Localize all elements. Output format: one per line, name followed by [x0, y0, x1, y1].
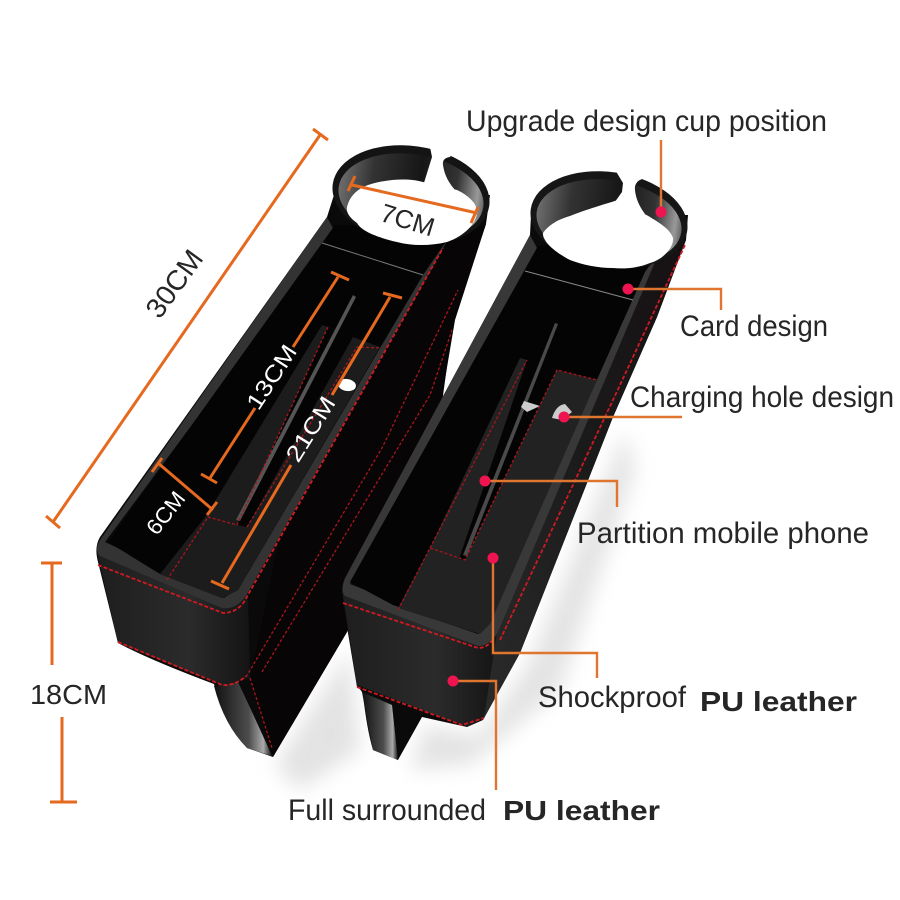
callout: cup position: Upgrade design cup position [466, 105, 827, 138]
dimension: 18CM [30, 563, 107, 802]
left leg [214, 682, 272, 756]
left rim [97, 217, 446, 608]
callout: card design: Card design [680, 310, 828, 343]
dimension: 18CM: 18CM [30, 679, 107, 710]
left card line [322, 243, 423, 275]
callout: full surrounded PU leather [288, 676, 660, 827]
callout: shockproof PU leather: Shockproof [538, 681, 687, 714]
right floor [398, 358, 597, 634]
product: left organizer [96, 135, 496, 757]
callout: card design [622, 284, 828, 343]
dimension: 7CM: 7CM [377, 198, 438, 242]
callout: full surrounded PU leather: Full surrounded [288, 794, 486, 827]
dimension: 6CM [141, 458, 217, 540]
dimension: 21CM: 21CM [280, 392, 340, 466]
callout: partition mobile phone [480, 476, 869, 550]
left divider slot [236, 295, 356, 521]
right rim [342, 235, 655, 646]
right stitching [343, 245, 685, 725]
right ring [524, 160, 694, 279]
right side strip [483, 240, 686, 720]
left floor [160, 325, 380, 598]
right card line [525, 271, 633, 300]
callout: charging hole [558, 381, 894, 422]
dimension: 30CM [46, 129, 328, 528]
dimension: 21CM [211, 293, 402, 589]
right divider slot [463, 323, 558, 556]
callout: shockproof PU leather [488, 552, 857, 717]
right leg [362, 692, 398, 760]
dimension: 6CM: 6CM [141, 486, 190, 540]
callout: cup position [466, 105, 827, 218]
right charging hole [521, 401, 572, 420]
left ring [326, 135, 496, 255]
callout: full surrounded PU leather: PU leather [503, 795, 660, 826]
right body silhouette [342, 215, 688, 760]
callout: shockproof PU leather: PU leather [700, 686, 857, 717]
left charging hole [337, 378, 357, 392]
left body silhouette [96, 195, 490, 757]
dimension: 13CM: 13CM [241, 340, 302, 414]
right front face [342, 590, 498, 727]
dimension: 13CM [201, 272, 349, 483]
ground shadows [275, 430, 635, 790]
left front face [97, 552, 250, 686]
dimension: 30CM: 30CM [139, 244, 209, 324]
left interior [108, 225, 445, 598]
right interior [350, 240, 652, 634]
left side panel [250, 224, 486, 757]
dimension: 7CM [348, 176, 478, 242]
left stitching [98, 248, 458, 748]
callout: partition mobile phone: Partition mobile phone [577, 517, 869, 550]
product: right organizer [342, 160, 694, 760]
